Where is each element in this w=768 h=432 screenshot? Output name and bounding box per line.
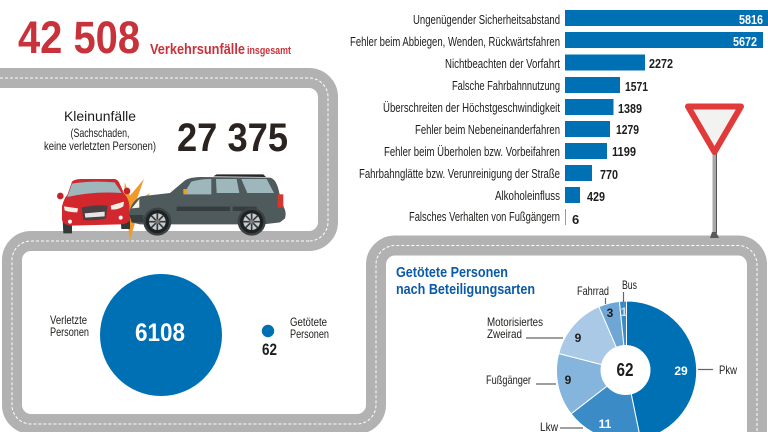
title: total accidents: 42 508	[18, 12, 140, 63]
donut labels: Bus	[622, 278, 637, 292]
label: injured	[50, 313, 89, 339]
heading: Getötete Personen	[396, 265, 508, 281]
icon: grey SUV	[129, 174, 286, 236]
road: top panel	[0, 78, 328, 241]
circle: killed	[262, 325, 274, 337]
bar labels: Ungenügender Sicherheitsabstand	[413, 13, 560, 27]
donut values	[565, 305, 688, 431]
bar values: 770	[600, 167, 618, 182]
label: injured: Personen	[50, 325, 89, 339]
bar labels: Falsche Fahrbahnnutzung	[452, 79, 560, 93]
bar values: 1571	[625, 79, 648, 94]
donut labels: Fahrrad	[577, 284, 609, 298]
bar labels: Falsches Verhalten von Fußgängern	[409, 210, 560, 224]
panel: killed persons by type of involvement	[396, 265, 737, 432]
bar values: 5672	[733, 34, 757, 49]
text: minor accidents	[44, 108, 156, 153]
title: total accidents	[18, 12, 291, 63]
bar values: 1199	[612, 144, 636, 159]
text: minor accidents: (Sachschaden,	[70, 126, 130, 140]
donut labels: Pkw	[719, 363, 737, 377]
label: killed	[290, 315, 329, 341]
bar values: 2272	[649, 56, 673, 71]
donut labels	[486, 278, 737, 432]
donut labels: Zweirad	[487, 327, 522, 341]
donut labels: Fußgänger	[486, 373, 531, 387]
number: injured: 6108	[135, 319, 185, 347]
icon: red car	[57, 179, 130, 233]
heading: nach Beteiligungsarten	[396, 282, 535, 298]
donut values: 1	[621, 305, 628, 319]
label: killed: Personen	[290, 327, 329, 341]
bar labels: Überschreiten der Höchstgeschwindigkeit	[383, 101, 560, 115]
donut leader lines	[526, 292, 713, 428]
donut values: 9	[565, 373, 572, 387]
donut total: 62	[616, 360, 634, 380]
icon: give-way sign	[688, 106, 741, 238]
bar labels: Fahrbahnglätte bzw. Verunreinigung der Straße	[359, 167, 560, 181]
bar labels	[350, 13, 560, 224]
label: injured: Verletzte	[50, 313, 87, 327]
icon: front wheel	[143, 208, 171, 236]
bar labels: Fehler beim Überholen bzw. Vorbeifahren	[384, 145, 560, 159]
donut values: 11	[599, 417, 612, 431]
bar values: 5816	[739, 12, 763, 27]
text: minor accidents: keine verletzten Personen)	[44, 139, 156, 153]
bar values: 1279	[616, 122, 639, 137]
text: minor accidents: Kleinunfälle	[64, 108, 136, 124]
donut values: 9	[575, 331, 582, 345]
title: total accidents: insgesamt	[247, 45, 291, 57]
heading	[396, 265, 535, 298]
bar values: 1389	[618, 101, 642, 116]
number: killed: 62	[262, 340, 277, 359]
bar values	[572, 12, 763, 227]
bar labels: Fehler beim Abbiegen, Wenden, Rückwärtsfahren	[350, 35, 560, 49]
label: killed: Getötete	[290, 315, 327, 329]
icon: spark	[124, 179, 150, 240]
bar labels: Nichtbeachten der Vorfahrt	[445, 57, 560, 71]
circle: injured	[100, 274, 222, 396]
donut chart	[556, 301, 697, 432]
title: total accidents: Verkehrsunfälle	[150, 41, 245, 58]
bar chart: accident causes	[350, 10, 768, 227]
bar labels: Fehler beim Nebeneinanderfahren	[415, 123, 560, 137]
number: minor accidents: 27 375	[177, 116, 288, 160]
bars	[565, 10, 768, 225]
road: lower panels	[12, 241, 757, 432]
panel: injured and killed persons	[50, 274, 329, 396]
bar values: 429	[587, 189, 605, 204]
bar values: 6	[572, 212, 579, 227]
bar labels: Alkoholeinfluss	[495, 189, 560, 203]
donut labels: Motorisiertes	[487, 315, 543, 329]
donut values: 29	[674, 364, 688, 378]
donut values: 3	[607, 306, 614, 320]
icon: rear wheel	[238, 208, 266, 236]
illustration: car collision	[57, 174, 286, 240]
